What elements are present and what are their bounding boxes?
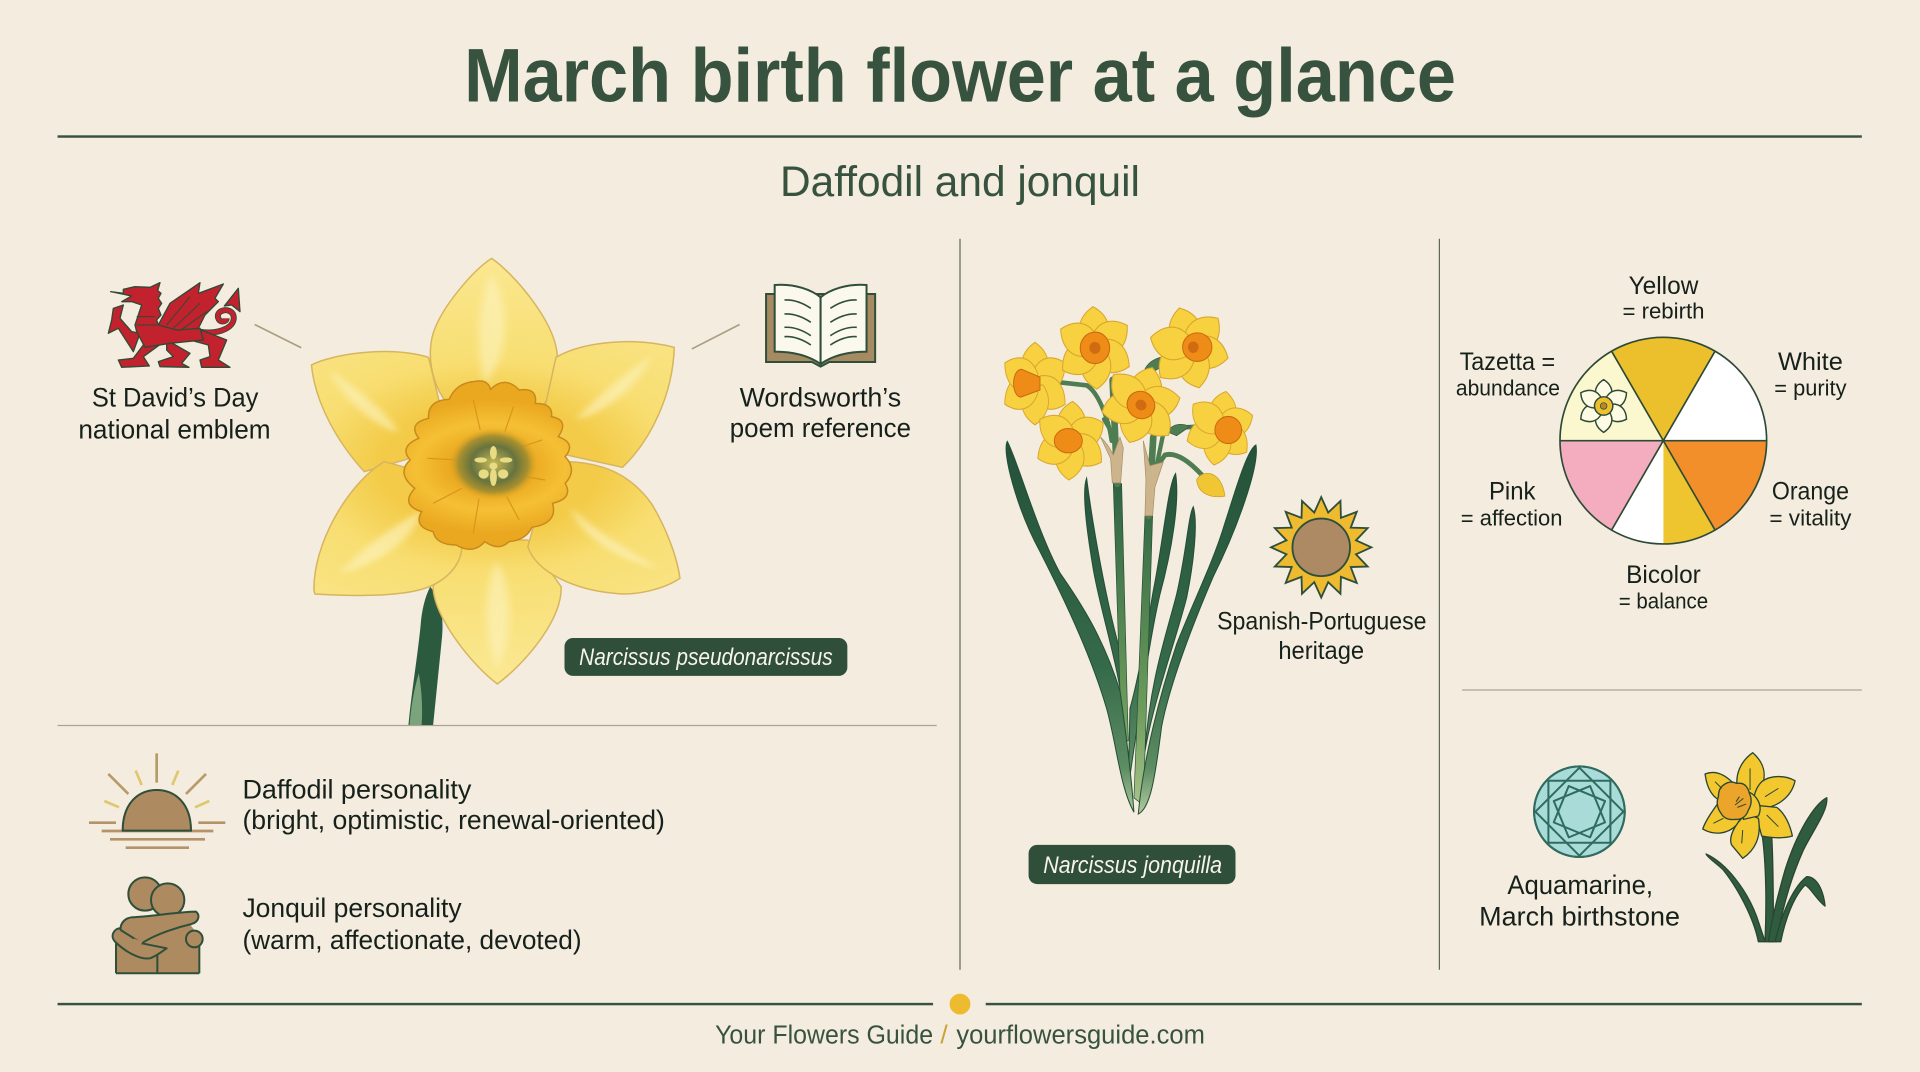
label: Orange <box>1769 478 1851 530</box>
label: Tazetta <box>1456 348 1560 401</box>
label: Bicolor <box>1619 561 1708 614</box>
label: Spanish-Portuguese heritage: Spanish-Portuguese <box>1217 607 1427 635</box>
label: Pink: Pink <box>1489 478 1536 506</box>
label: Bicolor: Bicolor <box>1626 561 1701 589</box>
book leader line <box>692 324 740 349</box>
small flower: right <box>1178 385 1262 472</box>
text: Jonquil personality: Jonquil personality <box>242 893 462 923</box>
small flower: top left <box>1052 304 1138 391</box>
footer: / <box>940 1019 948 1049</box>
label: St David's Day: national emblem <box>78 414 271 444</box>
label: Yellow: = rebirth <box>1622 298 1704 323</box>
jonquil bouquet illustration <box>998 296 1262 814</box>
large daffodil illustration <box>311 258 680 725</box>
text: Daffodil personality <box>242 774 665 835</box>
label: Orange: = vitality <box>1769 505 1851 530</box>
icon: sunrise <box>89 753 225 848</box>
label: White: = purity <box>1774 376 1847 401</box>
icon: aquamarine gem <box>1534 766 1625 857</box>
species tag: Narcissus jonquilla <box>1029 845 1236 884</box>
pie chart: colour meanings <box>1560 337 1767 544</box>
label: Yellow <box>1622 272 1704 323</box>
label: White: White <box>1778 348 1843 376</box>
label: Bicolor: = balance <box>1619 589 1708 614</box>
icon: open book <box>766 285 875 367</box>
label: Wordsworth's poem: poem reference <box>730 413 911 443</box>
species tag: Narcissus jonquilla: Narcissus jonquilla <box>1043 852 1222 879</box>
icon: hug <box>113 877 203 973</box>
label: Spanish-Portuguese heritage: heritage <box>1278 637 1364 665</box>
label: White <box>1774 348 1847 401</box>
label: Aquamarine: March birthstone <box>1479 902 1680 932</box>
label: Aquamarine: Aquamarine, <box>1507 870 1653 900</box>
panel: colour meanings <box>1456 272 1851 614</box>
footer <box>58 994 1862 1049</box>
small flower: side left <box>998 342 1072 425</box>
panel: birthstone <box>1479 753 1827 942</box>
panel: personalities <box>89 753 665 973</box>
footer: yourflowersguide.com <box>956 1019 1205 1049</box>
icon: Welsh dragon <box>108 283 240 367</box>
small flower: lower left <box>1030 399 1111 482</box>
label: Aquamarine <box>1479 870 1680 932</box>
icon: daffodil line drawing <box>1703 753 1827 942</box>
footer text: Your Flowers Guide <box>715 1019 933 1049</box>
label: Tazetta: abundance <box>1456 376 1560 401</box>
label: Tazetta: Tazetta = <box>1460 348 1555 376</box>
species tag: Narcissus pseudonarcissus: Narcissus pseudonarcissus <box>579 644 833 671</box>
panel: daffodil <box>78 258 911 725</box>
label: Wordsworth's poem: Wordsworth’s <box>740 383 901 413</box>
small flower: centre <box>1089 353 1193 457</box>
dragon leader line <box>255 324 301 348</box>
text: Daffodil personality: (bright, optimistic, renewal-oriented) <box>242 805 665 835</box>
icon: sun medallion <box>1271 497 1371 598</box>
species tag: Narcissus pseudonarcissus <box>564 638 847 676</box>
icon: tazetta flower <box>1577 380 1631 432</box>
title: March birth flower at a glance <box>464 34 1456 119</box>
label: Yellow: Yellow <box>1629 272 1699 300</box>
footer dot <box>950 994 970 1014</box>
label: St David's Day: St David’s Day <box>92 383 259 413</box>
text: Daffodil personality: Daffodil personality <box>242 774 472 804</box>
label: Spanish-Portuguese heritage <box>1217 607 1427 665</box>
label: St David's Day <box>78 383 271 444</box>
text: Jonquil personality: (warm, affectionate, devoted) <box>242 925 582 955</box>
small flower: top right <box>1138 296 1241 400</box>
label: Orange: Orange <box>1772 478 1849 506</box>
subtitle: Daffodil and jonquil <box>780 158 1140 206</box>
text: Jonquil personality <box>242 893 582 955</box>
label: Wordsworth's poem <box>730 383 911 443</box>
label: Pink <box>1461 478 1562 530</box>
panel: jonquil <box>998 296 1427 884</box>
label: Pink: = affection <box>1461 505 1562 530</box>
